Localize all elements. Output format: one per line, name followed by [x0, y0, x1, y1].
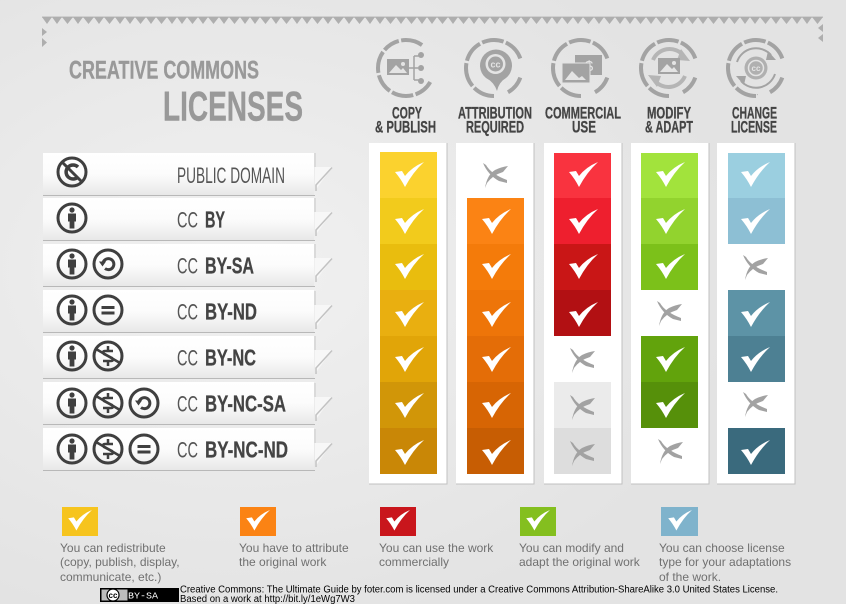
icon: change license: cc: [752, 64, 761, 73]
icons: by, nc, nd: [58, 435, 158, 463]
icons: by, nc: [58, 342, 122, 370]
column header: attribution required: ATTRIBUTION: [458, 104, 532, 122]
panel: attribution required column: [456, 143, 534, 484]
license row: public domain: [43, 153, 332, 196]
panel: modify and adapt column: [631, 143, 709, 484]
license row: cc by: BY: [205, 206, 225, 232]
legend: commercial: You can use the work: [379, 541, 494, 555]
column header: modify and adapt: & ADAPT: [645, 118, 693, 136]
legend: redistribute: (copy, publish, display,: [60, 555, 180, 569]
icons: by, sa: [58, 250, 122, 278]
column header: change license: LICENSE: [731, 118, 777, 136]
icon: attribution pin: cc: [490, 60, 501, 70]
icon: public domain: [58, 158, 86, 186]
legend: attribute: [239, 507, 349, 569]
legend: redistribute: [60, 507, 180, 584]
column header: change license: [728, 40, 784, 136]
legend: attribute: You have to attribute: [239, 541, 349, 555]
icon: attribution: [58, 204, 86, 232]
license row: cc by: CC: [177, 208, 198, 232]
column header: modify and adapt: MODIFY: [647, 104, 691, 122]
column header: copy and publish: & PUBLISH: [375, 118, 436, 136]
column header: commercial use: USE: [572, 118, 596, 136]
column header: commercial use: COMMERCIAL: [545, 104, 621, 122]
column header: commercial use: [545, 40, 621, 136]
title: CREATIVE COMMONS: [69, 56, 259, 84]
title: [69, 56, 303, 130]
license row: cc by-nd: CC: [177, 300, 198, 324]
icon: commercial: $: [585, 58, 594, 75]
legend: modify: adapt the original work: [519, 555, 641, 569]
legend: change license: type for your adaptations: [659, 555, 791, 569]
column header: modify and adapt: [641, 40, 697, 136]
legend: change license: of the work.: [659, 570, 721, 584]
column header: attribution required: REQUIRED: [466, 118, 524, 136]
license row: cc by-sa: BY-SA: [205, 252, 254, 278]
column header: copy and publish: [375, 40, 436, 136]
column header: copy and publish: COPY: [392, 104, 422, 122]
panel: copy and publish column: [369, 143, 447, 484]
icon: copy and publish: [378, 40, 434, 96]
title: LICENSES: [163, 82, 303, 130]
license row: cc by-nc-nd: [43, 428, 332, 471]
legend: attribute: the original work: [239, 555, 327, 569]
license row: cc by-nc-nd: BY-NC-ND: [205, 436, 288, 462]
license row: cc by-nc-nd: CC: [177, 438, 198, 462]
icon: modify: [641, 40, 697, 96]
legend: redistribute: You can redistribute: [60, 541, 166, 555]
column header: attribution required: [458, 40, 532, 136]
license row: cc by-nc: BY-NC: [205, 344, 256, 370]
license row: cc by-nc: [43, 336, 332, 379]
icons: by, nc, sa: [58, 389, 158, 417]
license row: public domain: PUBLIC DOMAIN: [177, 163, 285, 188]
cc by-sa badge: cc: [109, 591, 118, 600]
legend: redistribute: communicate, etc.): [60, 570, 161, 584]
legend: change license: You can choose license: [659, 541, 785, 555]
cc by-sa badge: [100, 588, 179, 602]
legend: modify: You can modify and: [519, 541, 624, 555]
license row: cc by-nc-sa: CC: [177, 392, 198, 416]
license row: cc by-nc: CC: [177, 346, 198, 370]
legend: commercial: [379, 507, 494, 569]
column header: change license: CHANGE: [732, 104, 777, 122]
legend: change license: [659, 507, 791, 584]
panel: commercial use column: [544, 143, 622, 484]
license row: cc by: [43, 198, 332, 241]
attribution footer: [180, 584, 778, 604]
attribution footer: Creative Commons: The Ultimate Guide by foter.com is licensed under a Creative Commons Attribution-ShareAlike 3.0 United States License.: [180, 584, 778, 596]
license row: cc by-nd: BY-ND: [205, 298, 257, 324]
decorative zigzag frame: [42, 16, 823, 47]
legend: commercial: commercially: [379, 555, 449, 569]
license row: cc by-nc-sa: [43, 382, 332, 425]
license row: cc by-sa: CC: [177, 254, 198, 278]
license row: cc by-nd: [43, 290, 332, 333]
legend: modify: [519, 507, 641, 569]
panel: change license column: [717, 143, 795, 484]
license row: cc by-sa: [43, 244, 332, 287]
license row: cc by-nc-sa: BY-NC-SA: [205, 390, 286, 416]
cc by-sa badge: BY-SA: [128, 592, 159, 602]
icons: by, nd: [58, 296, 122, 324]
